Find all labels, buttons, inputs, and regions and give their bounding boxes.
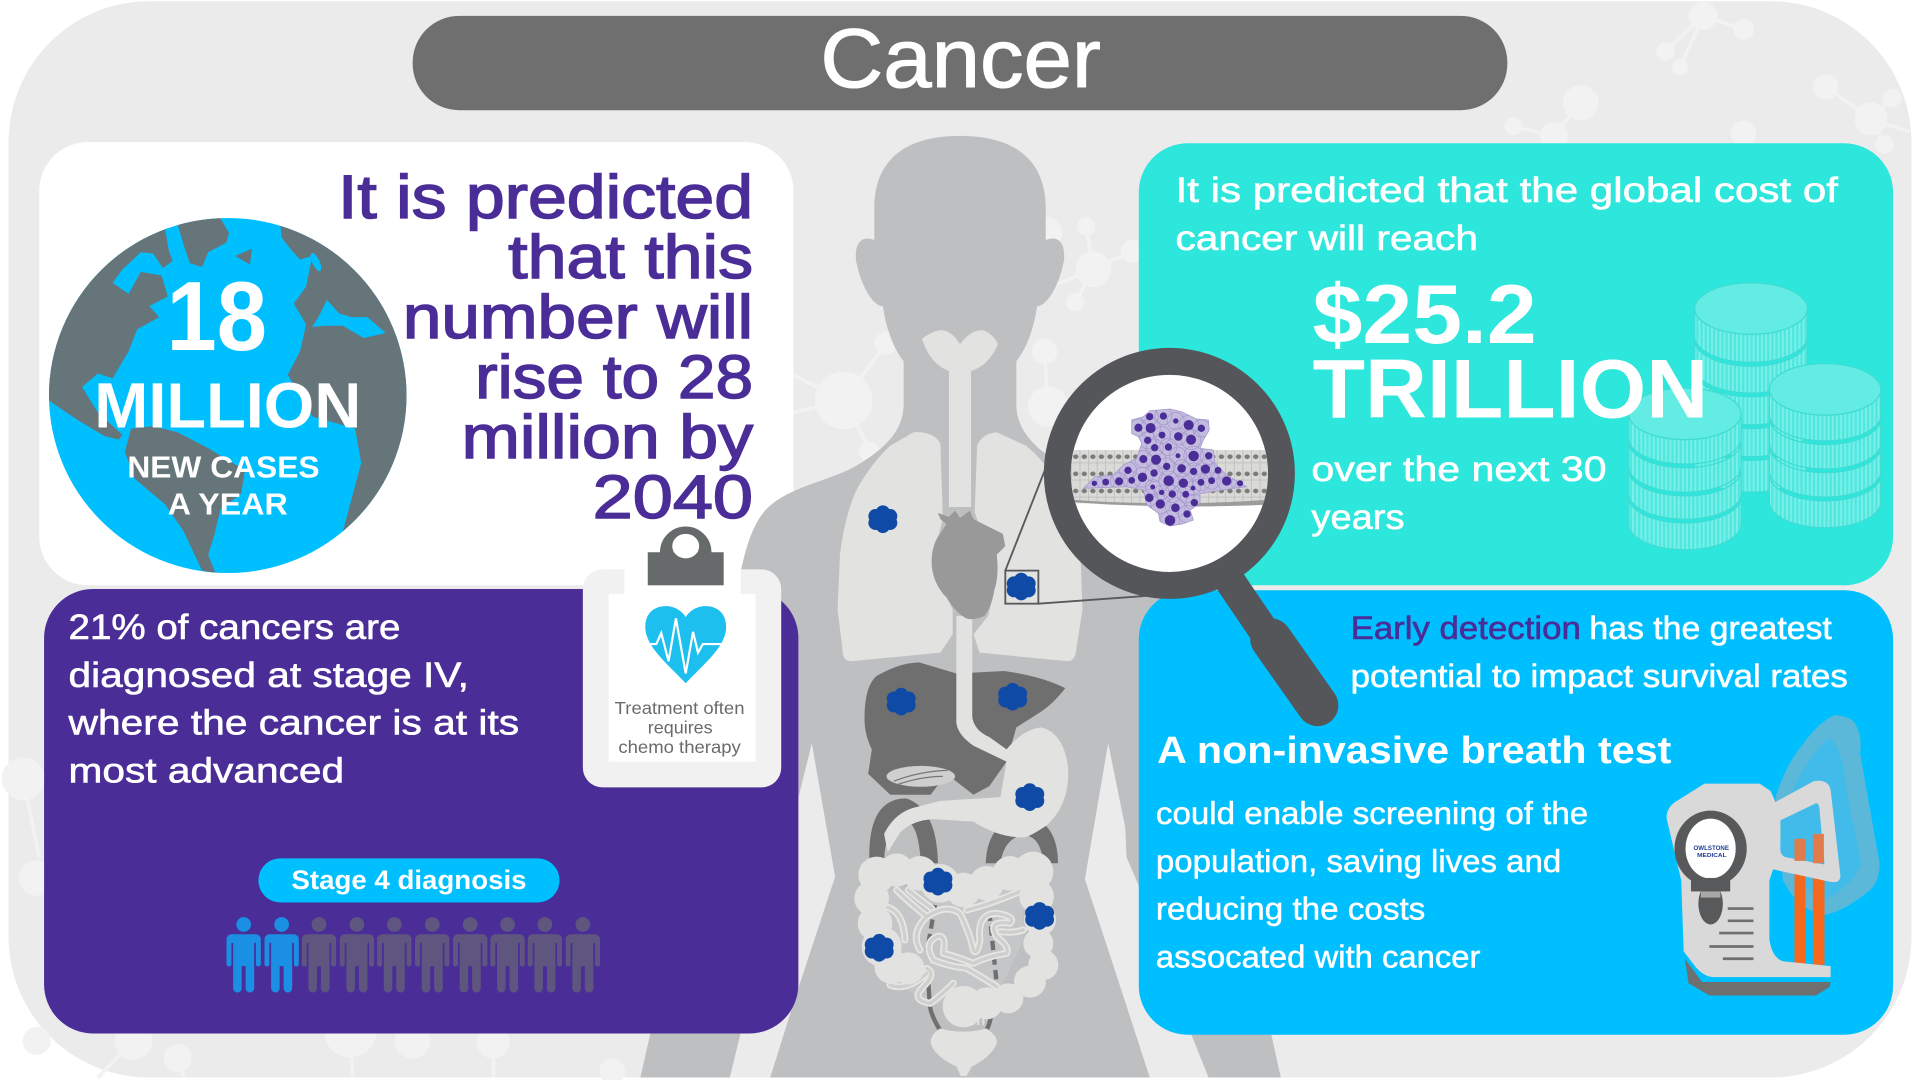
handle bbox=[1224, 573, 1318, 705]
label: stage 4 diagnosis bbox=[258, 858, 560, 902]
text: screening benefits bbox=[1156, 796, 1588, 974]
trachea bbox=[922, 330, 998, 507]
stat: 25.2 trillion bbox=[1313, 268, 1708, 436]
text: global cost intro bbox=[1176, 170, 1838, 258]
stat: 18 million bbox=[94, 261, 361, 521]
body silhouette bbox=[640, 136, 1281, 1078]
clip bbox=[648, 533, 724, 585]
icon: heart with pulse bbox=[645, 606, 726, 683]
stat: 18 million: A YEAR bbox=[168, 487, 288, 521]
panel: breath test bbox=[1139, 590, 1893, 1035]
heading: breath test: A non-invasive breath test bbox=[1157, 730, 1672, 772]
text: stage IV statistic bbox=[67, 607, 519, 790]
icon: breath test device bbox=[1667, 715, 1880, 996]
icon: coin stacks bbox=[1629, 283, 1881, 550]
heading: prediction: rise to 28 bbox=[475, 343, 753, 411]
heading: prediction: million by bbox=[462, 403, 753, 471]
text: screening benefits: could enable screening of the bbox=[1156, 796, 1588, 831]
text: treatment: chemo therapy bbox=[618, 737, 741, 757]
text: treatment: requires bbox=[648, 717, 713, 737]
text: early detection: potential to impact survival rates bbox=[1351, 658, 1848, 694]
text: global cost intro: cancer will reach bbox=[1176, 218, 1478, 258]
text: stage IV statistic: where the cancer is at its bbox=[67, 703, 519, 743]
text: treatment: Treatment often bbox=[615, 698, 744, 718]
text: treatment bbox=[615, 698, 744, 757]
kidneys and abdominal band bbox=[869, 798, 1058, 863]
icon: breath test device: OWLSTONE bbox=[1693, 845, 1729, 852]
title: Cancer bbox=[820, 12, 1101, 105]
heading: prediction: 2040 bbox=[593, 463, 753, 531]
label: stage 4 diagnosis: Stage 4 diagnosis bbox=[291, 865, 527, 895]
text: early detection: Early detection bbox=[1351, 610, 1581, 646]
text: early detection: has the greatest bbox=[1589, 610, 1832, 646]
body gaps bbox=[730, 743, 1209, 1078]
stat: 18 million: MILLION bbox=[94, 370, 361, 441]
text: over the next 30 years: years bbox=[1311, 497, 1404, 537]
lungs bbox=[838, 330, 1082, 661]
panel: stage IV bbox=[44, 589, 798, 1033]
text: over the next 30 years bbox=[1311, 449, 1607, 537]
panel: global cost bbox=[1139, 143, 1893, 585]
heading: prediction: It is predicted bbox=[338, 163, 753, 231]
text: over the next 30 years: over the next 30 bbox=[1311, 449, 1607, 489]
heading: prediction: number will bbox=[403, 283, 753, 351]
icon: globe bbox=[48, 218, 407, 573]
magnifying glass bbox=[1005, 361, 1318, 705]
text: stage IV statistic: diagnosed at stage IV, bbox=[69, 655, 469, 695]
stat: 25.2 trillion: TRILLION bbox=[1313, 343, 1708, 436]
icon: breath test device: MEDICAL bbox=[1697, 853, 1727, 859]
bladder bbox=[931, 1028, 997, 1076]
zoom box and guide lines bbox=[1005, 456, 1157, 604]
pancreas bbox=[887, 766, 955, 787]
text: early detection bbox=[1351, 610, 1848, 694]
text: screening benefits: assocated with cancer bbox=[1156, 939, 1480, 974]
stat: 25.2 trillion: $25.2 bbox=[1313, 268, 1537, 361]
human body illustration bbox=[640, 136, 1281, 1078]
text: global cost intro: It is predicted that the global cost of bbox=[1176, 170, 1838, 210]
stat: 18 million: NEW CASES bbox=[127, 451, 320, 485]
chart: people pictogram bbox=[227, 917, 600, 992]
text: screening benefits: reducing the costs bbox=[1156, 892, 1425, 927]
heart bbox=[932, 511, 1005, 619]
oesophagus and stomach bbox=[884, 616, 1068, 852]
text: stage IV statistic: most advanced bbox=[69, 750, 344, 790]
title bar bbox=[413, 12, 1507, 110]
intestines and colon bbox=[854, 852, 1058, 1076]
text: screening benefits: population, saving lives and bbox=[1156, 844, 1561, 879]
heading: prediction bbox=[338, 163, 753, 531]
stat: 18 million: 18 bbox=[167, 261, 267, 371]
tumours bbox=[865, 505, 1054, 962]
panel: global new cases bbox=[37, 142, 793, 585]
text: stage IV statistic: 21% of cancers are bbox=[69, 607, 400, 647]
cancer cells bbox=[1070, 408, 1270, 530]
clipboard bbox=[583, 533, 781, 787]
liver bbox=[864, 662, 1065, 795]
heading: prediction: that this bbox=[508, 223, 753, 291]
